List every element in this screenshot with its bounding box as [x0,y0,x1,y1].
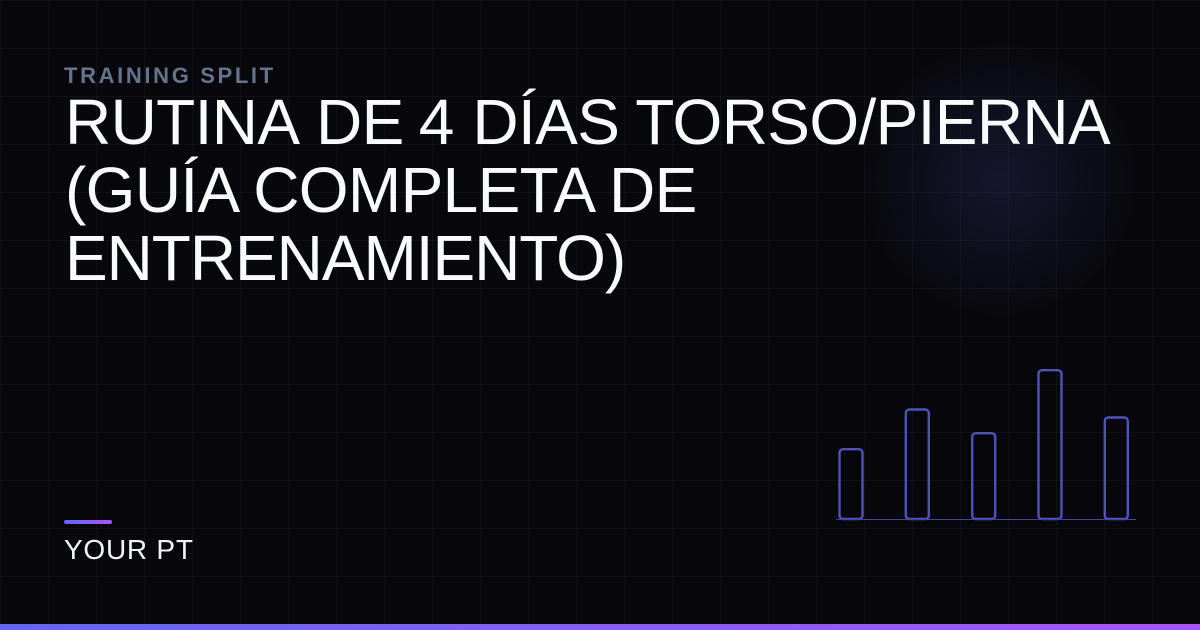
title: ENTRENAMIENTO) [65,222,625,294]
title [65,86,1110,294]
title: RUTINA DE 4 DÍAS TORSO/PIERNA [65,86,1110,158]
eyebrow label: TRAINING SPLIT [64,63,276,88]
brand name: YOUR PT [64,534,194,565]
title: (GUÍA COMPLETA DE [65,154,697,226]
bottom gradient bar [0,624,1200,630]
accent rule [64,520,112,524]
